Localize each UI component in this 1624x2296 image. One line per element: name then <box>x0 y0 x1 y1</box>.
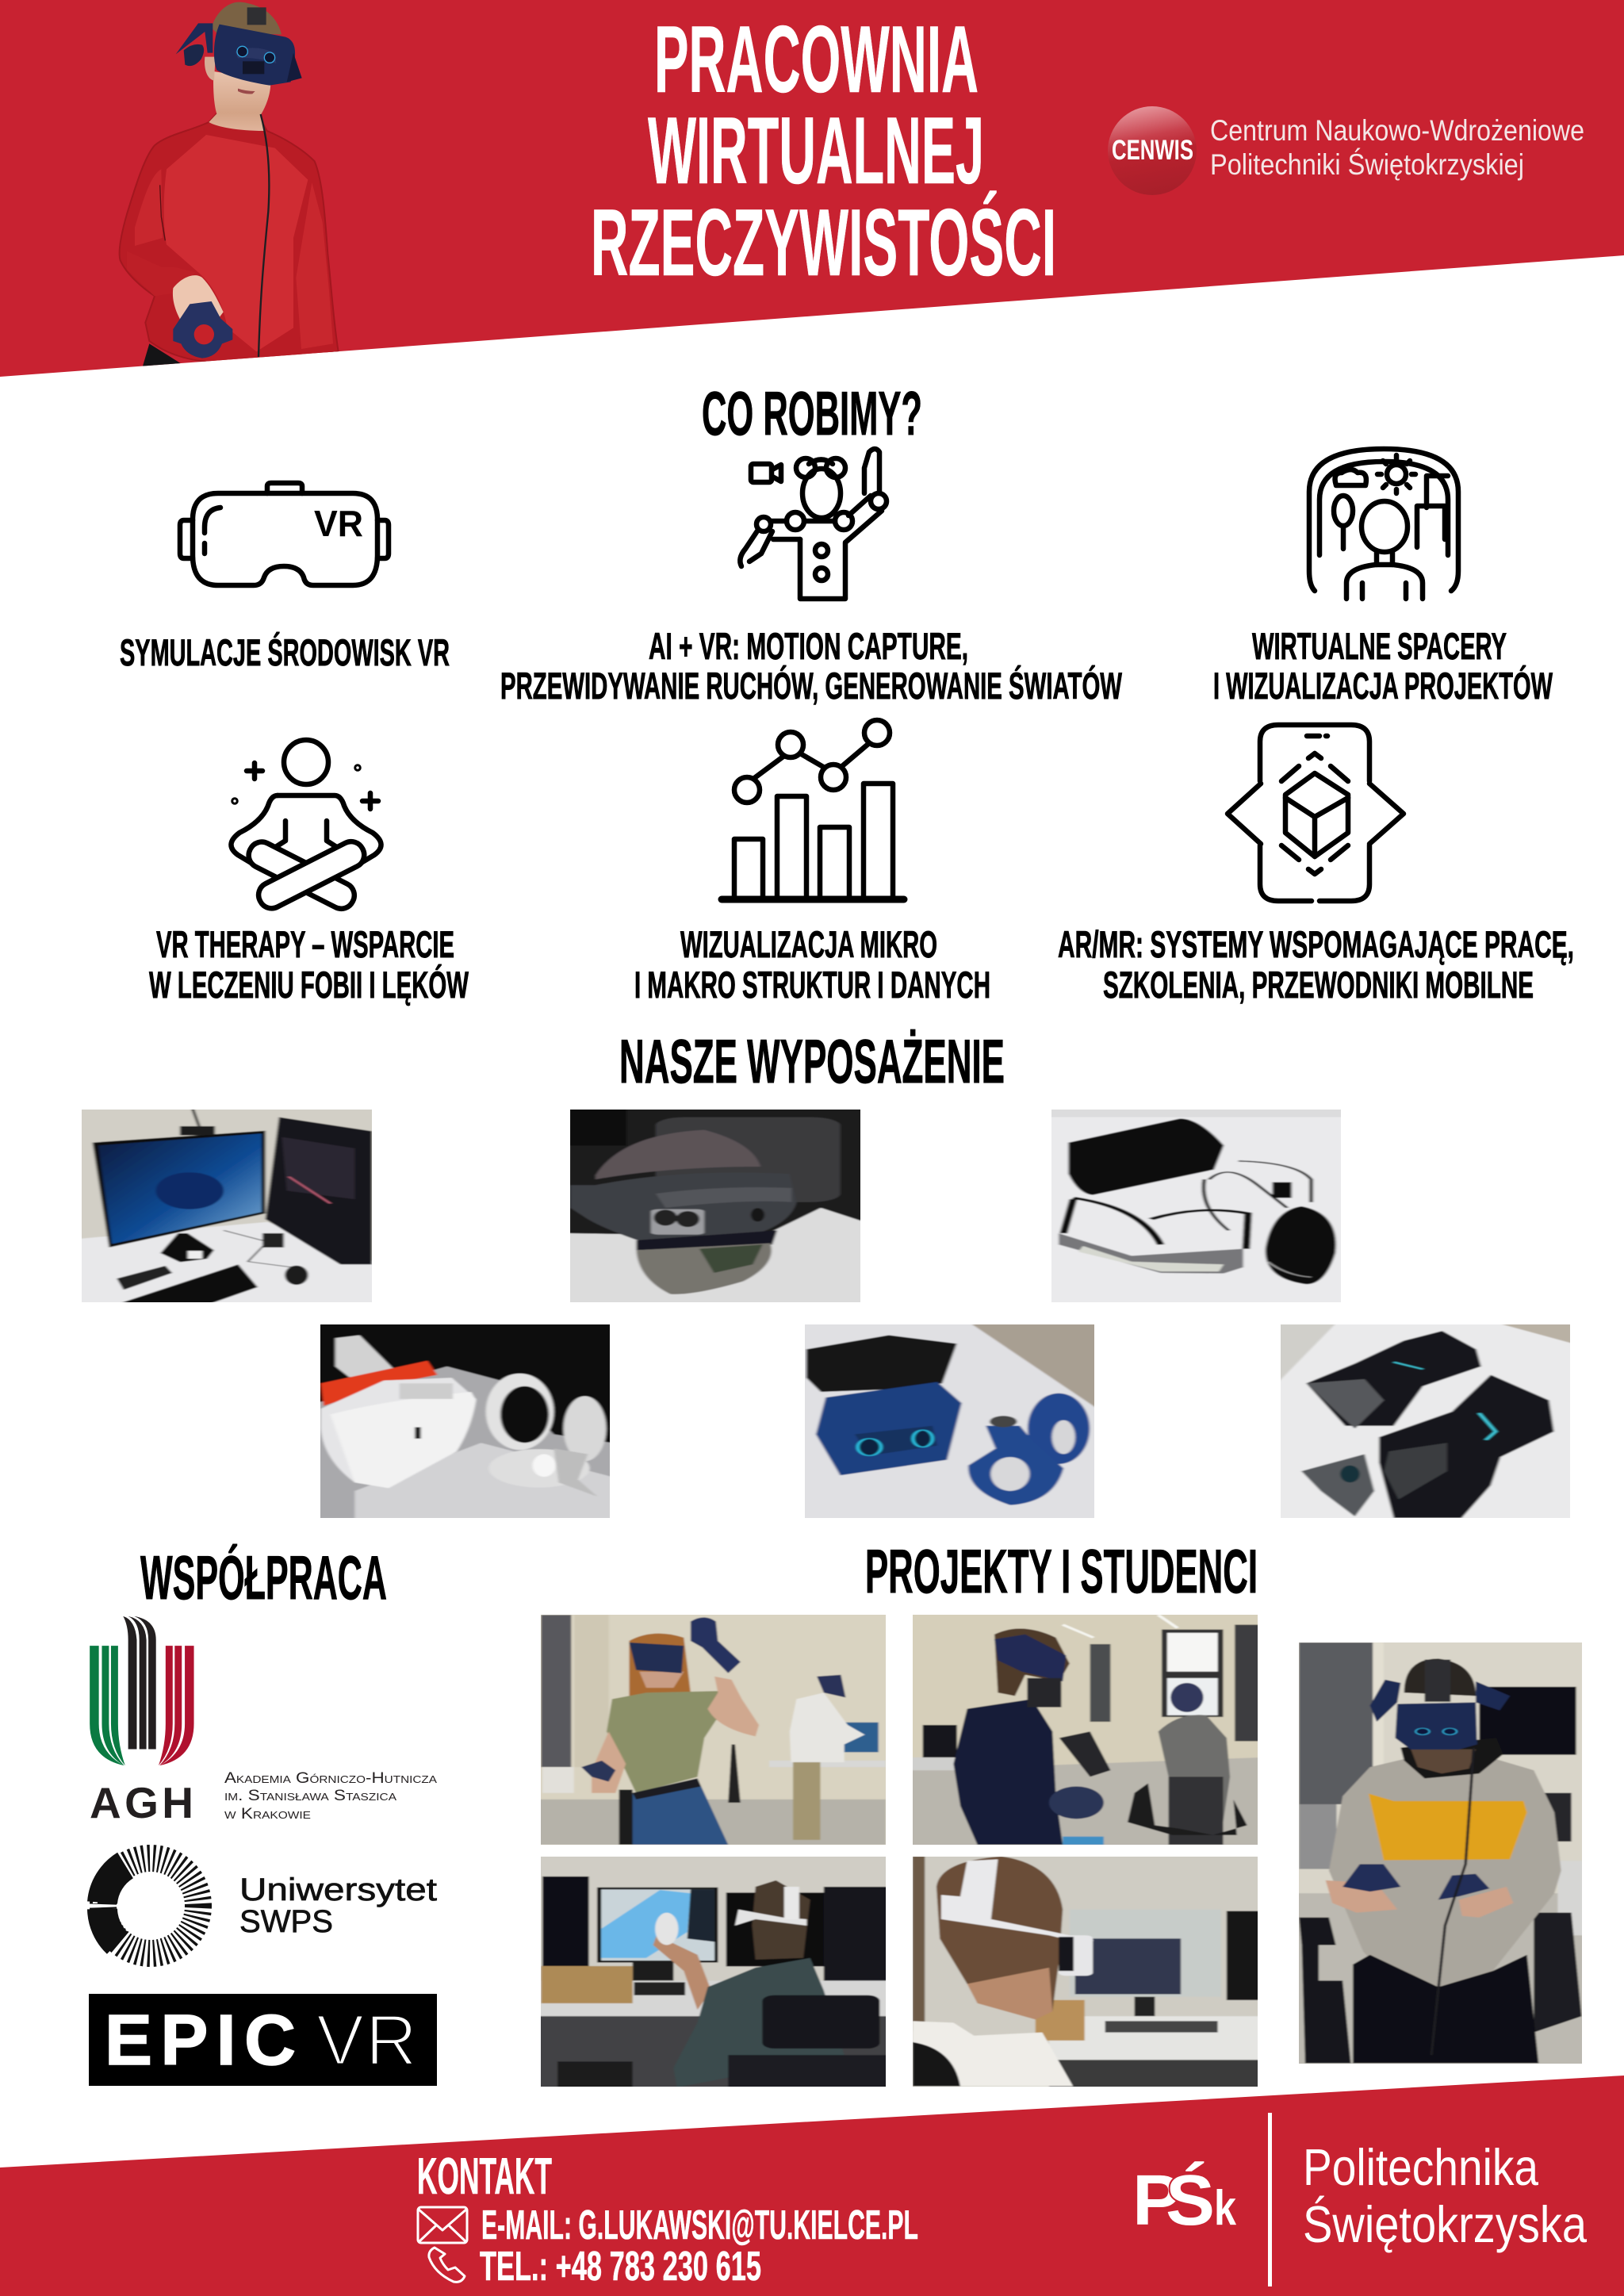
footer red band <box>0 2076 1624 2296</box>
logo: SWPS: Uniwersytet <box>239 1872 437 1907</box>
logo: AGH <box>90 1616 437 1827</box>
label: AR/MR <box>1058 923 1574 1006</box>
contact block: KONTAKT <box>417 2147 552 2205</box>
label: symulacje: SYMULACJE ŚRODOWISK VR <box>120 631 450 673</box>
photo: Quest headset <box>316 1324 612 1520</box>
logo: EPIC VR <box>89 1994 437 2086</box>
logo: SWPS: SWPS <box>239 1904 333 1939</box>
title <box>591 6 1056 296</box>
logo: CENWIS <box>1108 106 1584 195</box>
label: wizualizacja: WIZUALIZACJA MIKRO <box>680 923 937 965</box>
label: wizualizacja: I MAKRO STRUKTUR I DANYCH <box>634 964 990 1006</box>
heading: projekty i studenci: PROJEKTY I STUDENCI <box>865 1536 1258 1606</box>
contact block: E-MAIL: G.LUKAWSKI@TU.KIELCE.PL <box>481 2202 918 2248</box>
photo: man in VR headset <box>120 2 339 366</box>
icon: virtual walk <box>1309 449 1458 599</box>
icon: VR headset <box>180 483 389 585</box>
label: AI + VR: PRZEWIDYWANIE RUCHÓW, GENEROWANIE ŚWIATÓW <box>500 665 1122 707</box>
logo: EPIC VR: VR <box>316 2001 417 2080</box>
photo: two men in VR <box>909 1614 1264 1846</box>
label: AI + VR: AI + VR: MOTION CAPTURE, <box>649 625 968 667</box>
logo: Politechnika Swietokrzyska: Politechnika <box>1303 2138 1539 2196</box>
logo: AGH: Akademia Górniczo-Hutnicza <box>224 1770 437 1787</box>
photo: man at computer <box>537 1854 892 2087</box>
photo: PC and monitor <box>78 1109 384 1304</box>
icon: motion capture <box>740 449 887 599</box>
logo: EPIC VR: EPIC <box>105 2001 296 2080</box>
label: VR therapy: W LECZENIU FOBII I LĘKÓW <box>149 964 469 1006</box>
photo: man with yellow sweater <box>1295 1641 1585 2064</box>
contact block: TEL.: +48 783 230 615 <box>480 2244 761 2290</box>
logo: AGH: AGH <box>90 1778 193 1827</box>
heading: wspolpraca: WSPÓŁPRACA <box>140 1543 387 1612</box>
icon: phone <box>429 2248 465 2282</box>
icon: envelope <box>418 2207 467 2243</box>
logo: AGH: im. Stanisława Staszica <box>224 1788 396 1804</box>
logo: Politechnika Swietokrzyska: Ś <box>1166 2160 1215 2240</box>
logo: Politechnika Swietokrzyska: k <box>1214 2181 1236 2236</box>
logo: AGH: w Krakowie <box>224 1806 311 1823</box>
heading: nasze wyposazenie: NASZE WYPOSAŻENIE <box>619 1026 1005 1096</box>
title: PRACOWNIA <box>654 6 979 113</box>
heading: co robimy: CO ROBIMY? <box>702 378 922 448</box>
icon: meditation <box>231 740 381 913</box>
logo: CENWIS: CENWIS <box>1112 135 1193 166</box>
icon: AR phone <box>1228 725 1404 901</box>
contact block <box>417 2147 918 2290</box>
label: VR therapy: VR THERAPY – WSPARCIE <box>156 923 454 965</box>
logo: CENWIS: Politechniki Świętokrzyskiej <box>1210 148 1524 181</box>
logo: SWPS <box>95 1858 437 1953</box>
photo: Vive headset and controllers <box>802 1324 1097 1520</box>
title: WIRTUALNEJ <box>648 98 984 204</box>
logo: Politechnika Swietokrzyska <box>1132 2113 1588 2286</box>
logo: Politechnika Swietokrzyska: Świętokrzyska <box>1303 2195 1588 2253</box>
photo: HoloLens <box>569 1109 864 1304</box>
photo: man from behind <box>909 1854 1267 2087</box>
label: wizualizacja <box>634 923 990 1006</box>
photo: haptic gloves <box>1277 1324 1573 1520</box>
photo: smart glasses <box>1049 1109 1345 1304</box>
title: RZECZYWISTOŚCI <box>591 190 1056 296</box>
label: AI + VR <box>500 625 1122 707</box>
label: VR therapy <box>149 923 469 1006</box>
logo: Politechnika Swietokrzyska: P <box>1132 2161 1182 2240</box>
icon: VR headset: VR <box>314 503 363 544</box>
icon: bar chart <box>722 720 904 899</box>
photo: woman with controllers <box>537 1614 892 1846</box>
label: wirtualne spacery <box>1213 625 1553 707</box>
header red band <box>0 0 1624 377</box>
